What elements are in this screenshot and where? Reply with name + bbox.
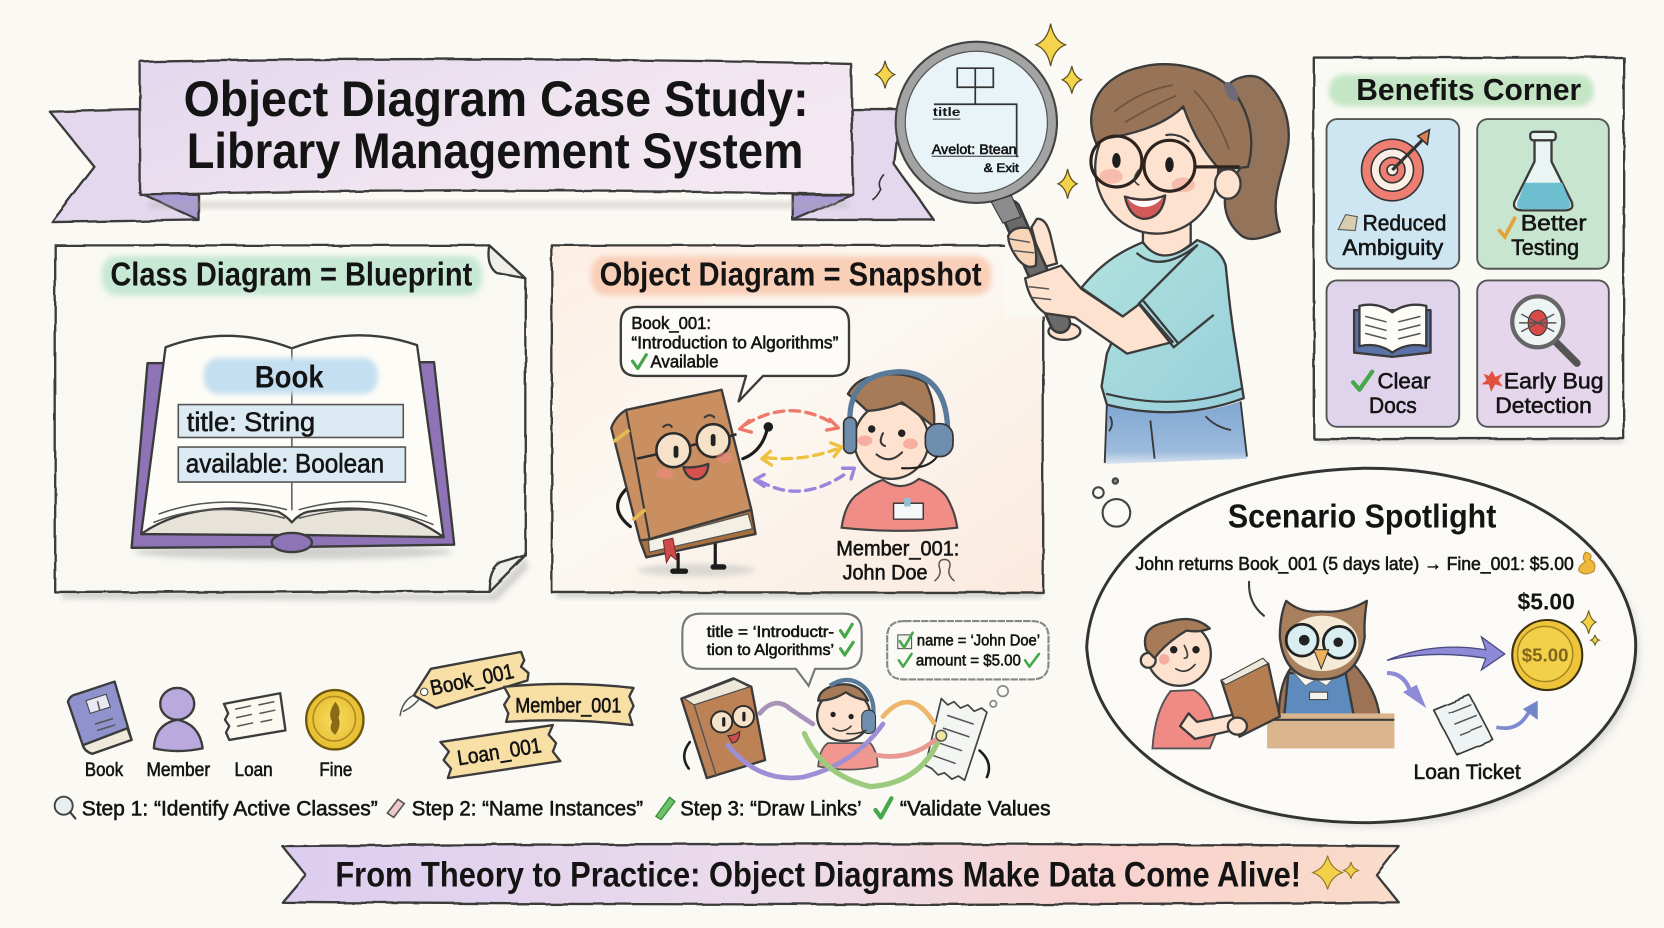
beak	[1314, 650, 1329, 669]
blush	[656, 452, 733, 479]
ribbon node	[936, 730, 947, 741]
microphone	[902, 457, 937, 468]
ponytail	[1225, 76, 1289, 239]
card: reduced ambiguity: Ambiguity	[1342, 235, 1444, 260]
bookmark	[663, 538, 677, 563]
heading highlight	[1329, 75, 1594, 106]
banner left tail	[50, 110, 198, 222]
banner right tail	[793, 110, 934, 220]
upper hand fingers	[1008, 228, 1036, 267]
sparkles	[1313, 856, 1358, 890]
card: early bug detection: Detection	[1495, 393, 1592, 418]
boy hand	[1228, 718, 1247, 735]
head	[854, 402, 929, 479]
check mark	[632, 355, 646, 368]
tag: Loan_001: Loan_001	[456, 734, 543, 770]
character: girl with magnifier	[1008, 64, 1289, 464]
fine amount: $5.00	[1518, 588, 1575, 614]
hair	[848, 374, 934, 427]
page curl bottom	[489, 555, 525, 591]
neck	[1143, 223, 1191, 257]
icon labels: Member	[146, 760, 211, 781]
icon: bug magnifier	[1512, 296, 1577, 363]
eyes	[1299, 635, 1310, 645]
panel: class diagram	[55, 245, 528, 601]
title text: Library Management System	[187, 123, 803, 179]
icon: open book	[1354, 305, 1431, 357]
feet	[673, 567, 724, 571]
arrow from ticket to coin	[1496, 709, 1530, 728]
cover	[611, 390, 751, 540]
loan ticket	[1434, 695, 1493, 755]
nose	[1134, 170, 1139, 185]
thought dots	[990, 686, 1008, 707]
badge	[894, 498, 923, 519]
person icon	[935, 560, 954, 581]
icon: target	[1362, 130, 1429, 201]
bubble: name and amount: name = ‘John Doe’	[917, 632, 1040, 649]
open book illustration	[132, 335, 454, 560]
footer banner	[282, 844, 1399, 904]
card: early bug detection	[1477, 280, 1609, 427]
check marks	[840, 624, 853, 655]
receipt arm	[980, 751, 989, 777]
handle core	[1010, 210, 1060, 323]
raised hand	[764, 422, 773, 432]
teeth	[1128, 198, 1162, 207]
back hand	[1048, 323, 1080, 340]
attribute: title: title: String	[187, 407, 315, 437]
card: clear docs: Clear	[1377, 369, 1431, 394]
arrow to coin	[1387, 637, 1505, 670]
steps row	[55, 797, 1051, 820]
sleeve lines	[1139, 245, 1213, 347]
card: reduced ambiguity	[1327, 119, 1459, 269]
step 4: “Validate Values	[900, 797, 1051, 820]
eyes	[676, 436, 713, 456]
legs	[678, 544, 715, 570]
mouth	[683, 464, 708, 479]
bubble shadow	[1097, 478, 1639, 826]
magnifier thumb	[1032, 219, 1057, 268]
rim outlines	[896, 42, 1057, 203]
coin: $5.00	[1522, 645, 1568, 665]
icon labels	[85, 760, 352, 781]
title banner	[50, 59, 934, 222]
icon labels: Book	[85, 760, 123, 781]
spine bands	[613, 430, 645, 520]
bubble: title value	[682, 614, 862, 686]
lens diagram	[932, 68, 1020, 175]
glasses	[1286, 624, 1355, 658]
icon: green pencil	[656, 797, 675, 820]
glasses	[1091, 136, 1240, 191]
panel shadow	[62, 557, 528, 601]
eyebrow	[1166, 135, 1189, 141]
receipt	[925, 699, 987, 780]
bubble: title value: title = ‘Introductr-	[707, 624, 834, 641]
member name: Member_001:	[836, 537, 959, 560]
face	[1095, 102, 1218, 234]
scene: linked objects	[681, 614, 1048, 787]
arrow to ticket	[1387, 673, 1411, 695]
heading highlight	[102, 256, 482, 295]
eyebrows	[663, 415, 714, 427]
finger lines	[1010, 239, 1034, 253]
book underside	[640, 510, 756, 557]
coin	[1512, 620, 1582, 690]
lens diagram: & Exit	[984, 162, 1020, 175]
card: better testing: Testing	[1511, 235, 1579, 260]
heading highlight	[591, 256, 991, 295]
speech bubble: Book_001:	[631, 313, 711, 334]
small book character	[681, 678, 765, 778]
scenario sentence: John returns Book_001 (5 days late) → Fine_001: $5.00	[1136, 553, 1574, 575]
panel sheet	[55, 245, 525, 592]
owl body	[1279, 664, 1380, 718]
step 3: Step 3: “Draw Links’	[680, 797, 862, 820]
book pages	[141, 335, 444, 537]
name tag	[1310, 692, 1328, 700]
icon: magnifier	[55, 797, 75, 818]
panel: benefits corner	[1314, 58, 1624, 443]
ear	[1215, 169, 1241, 199]
jeans	[1105, 401, 1247, 464]
attribute: available: available: Boolean	[186, 448, 384, 478]
book shadow	[134, 545, 452, 560]
bubble: name and amount	[887, 621, 1048, 679]
card: better testing	[1477, 119, 1609, 269]
icon labels: Fine	[319, 760, 352, 781]
heading: Scenario Spotlight	[1228, 498, 1496, 535]
ticket label: Loan Ticket	[1414, 761, 1521, 784]
receipt lines	[934, 716, 973, 763]
arms	[618, 429, 767, 527]
icon: loan receipt	[224, 693, 285, 740]
class name: Book	[255, 359, 324, 395]
bubble: title value: tion to Algorithms’	[707, 642, 834, 659]
magnifying glass	[896, 42, 1057, 223]
link arrows	[740, 411, 854, 491]
step 1: Step 1: “Identify Active Classes”	[82, 797, 378, 820]
member character	[836, 372, 959, 585]
banner shape	[282, 844, 1399, 904]
ground shadow	[638, 564, 755, 576]
icon labels: Loan	[235, 760, 273, 781]
icon: book	[68, 682, 132, 754]
mouth	[1125, 196, 1165, 219]
glasses	[637, 424, 736, 467]
heading: Benefits Corner	[1356, 72, 1581, 107]
step 2: Step 2: “Name Instances”	[412, 797, 643, 820]
collar	[1293, 671, 1339, 686]
attribute: title	[178, 405, 403, 437]
book character	[611, 390, 773, 576]
eyes	[1112, 153, 1174, 172]
card: early bug detection: Early Bug	[1504, 369, 1604, 394]
lens	[900, 46, 1053, 199]
tag: Member_001: Member_001	[515, 694, 621, 717]
title text: Object Diagram Case Study:	[184, 71, 809, 127]
link ribbons	[728, 702, 940, 787]
icon: coin	[306, 690, 363, 749]
tag: Book_001: Book_001	[428, 660, 516, 700]
book spine knob	[272, 533, 312, 552]
card: reduced ambiguity: Reduced	[1363, 211, 1446, 236]
torso shirt	[1081, 240, 1244, 412]
hair strands	[1114, 85, 1229, 149]
collar	[1137, 245, 1197, 262]
title text	[184, 71, 809, 179]
boy	[1141, 619, 1242, 748]
head	[1280, 601, 1367, 679]
thought dots	[1093, 478, 1130, 527]
book cover	[132, 362, 454, 550]
banner text: From Theory to Practice: Object Diagrams Make Data Come Alive!	[335, 855, 1301, 894]
icon: member	[154, 688, 203, 751]
headset	[850, 372, 948, 430]
face disk	[1286, 616, 1358, 671]
pages	[648, 514, 752, 552]
card: clear docs	[1327, 280, 1459, 427]
counter	[1266, 713, 1394, 748]
thought bubble	[1087, 468, 1636, 823]
member character: John Doe	[843, 562, 928, 585]
icon row: active classes	[68, 682, 363, 781]
speech bubble: Available	[651, 351, 718, 371]
speech bubble	[621, 307, 849, 401]
lens diagram: Avelot: Btean	[932, 142, 1017, 157]
sparkles	[876, 24, 1081, 199]
card: better testing: Better	[1521, 211, 1587, 236]
hair tie	[1221, 80, 1241, 103]
spine	[626, 410, 649, 538]
body	[842, 479, 957, 531]
small member character	[817, 680, 878, 770]
tag: Loan_001	[440, 725, 560, 778]
arrow head to ticket	[1403, 685, 1426, 708]
ear cups	[844, 417, 953, 457]
blush	[1099, 169, 1195, 192]
page curl top	[488, 245, 525, 278]
arm and lower hand	[1025, 266, 1173, 354]
icon: flask	[1514, 132, 1572, 210]
class name highlight	[204, 358, 378, 394]
panel box	[1314, 58, 1624, 439]
tail squiggle	[872, 174, 884, 200]
panel shadow	[556, 590, 1042, 598]
speech bubble: “Introduction to Algorithms”	[631, 332, 839, 352]
hair	[1091, 64, 1251, 170]
arrow head to coin	[1523, 701, 1538, 720]
instance name tags	[400, 652, 634, 778]
apron	[1284, 673, 1354, 718]
banner shadow	[149, 202, 849, 208]
small icon	[1338, 215, 1357, 231]
lower finger lines	[1029, 287, 1051, 300]
card: clear docs: Docs	[1369, 393, 1417, 418]
lens diagram: title	[933, 106, 961, 119]
icon: eraser	[387, 799, 404, 817]
page lines	[154, 348, 433, 524]
tag: Member_001	[504, 684, 634, 725]
tag: Book_001	[400, 652, 528, 716]
page block bottom	[141, 508, 444, 537]
owl librarian	[1221, 601, 1394, 748]
heading: Class Diagram = Blueprint	[110, 256, 472, 293]
icon: double check	[876, 798, 891, 817]
panel: scenario spotlight	[1087, 468, 1639, 826]
panel sheet	[552, 245, 1043, 592]
hem	[1107, 389, 1242, 402]
bubble: name and amount: amount = $5.00	[916, 653, 1021, 670]
panel: object diagram	[552, 236, 1053, 598]
returned book	[1221, 664, 1280, 737]
sparkles	[1581, 610, 1599, 645]
panel shadow	[1318, 436, 1624, 443]
jeans outline and pockets	[1105, 401, 1247, 463]
speech tick	[1249, 582, 1264, 616]
handle collar	[991, 196, 1021, 223]
banner body	[140, 59, 853, 194]
icon: burst	[1481, 371, 1503, 392]
icon: money bag	[1579, 552, 1595, 574]
open corner behind girl	[1005, 236, 1053, 316]
magnifier handle	[1010, 210, 1060, 323]
heading: Object Diagram = Snapshot	[600, 256, 982, 293]
face	[857, 425, 918, 459]
